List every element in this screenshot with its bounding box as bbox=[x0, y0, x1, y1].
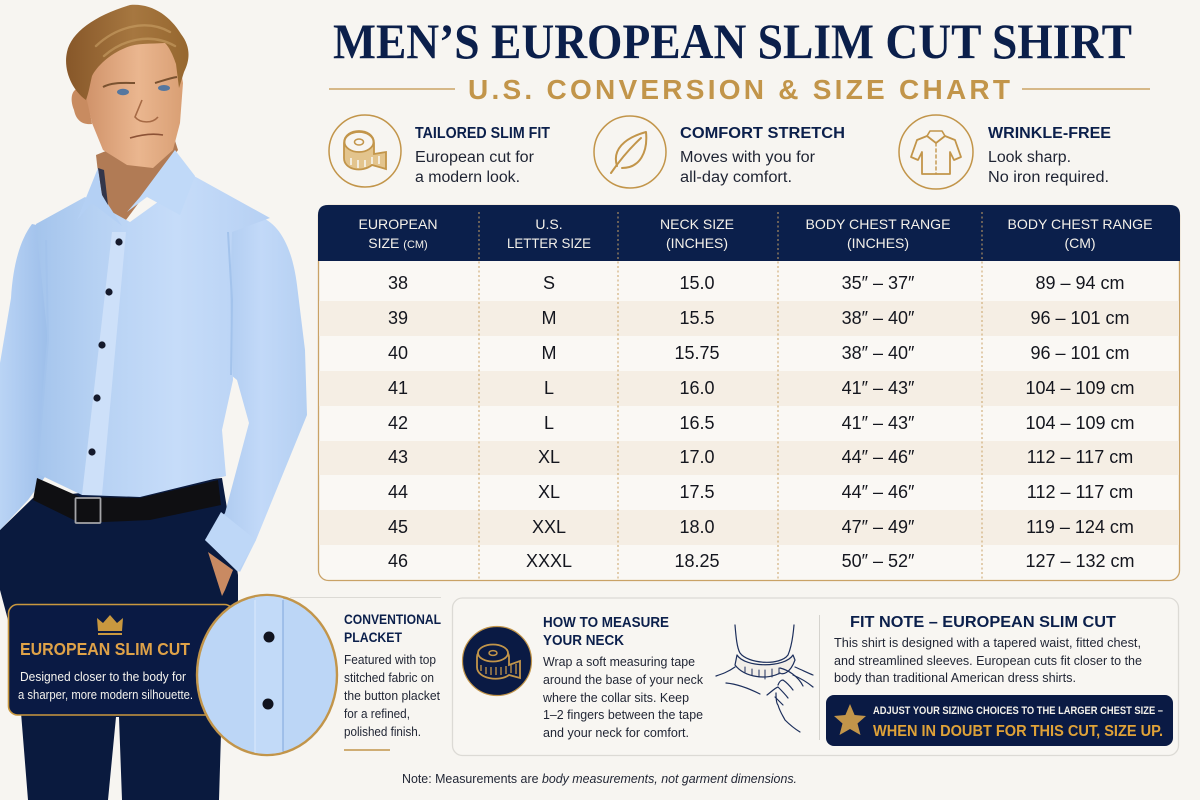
row: 46: 50″ – 52″ bbox=[842, 551, 915, 571]
how to measure text: and your neck for comfort. bbox=[543, 725, 689, 740]
row: 41: 104 – 109 cm bbox=[1025, 378, 1135, 398]
text: TAILORED SLIM FIT bbox=[415, 125, 550, 142]
conventional placket text: PLACKET bbox=[344, 630, 403, 645]
row: 38: 35″ – 37″ bbox=[842, 273, 915, 293]
row: 39: M bbox=[542, 308, 556, 328]
row: 40: 15.75 bbox=[674, 343, 720, 363]
row: 38 bbox=[388, 273, 1125, 293]
row: 38: S bbox=[543, 273, 555, 293]
row: 45 bbox=[388, 517, 1134, 537]
fit note text: body than traditional American dress shirts. bbox=[834, 670, 1076, 685]
size chart table bbox=[318, 205, 1180, 581]
row: 39: 15.5 bbox=[679, 308, 715, 328]
placket bbox=[82, 232, 126, 495]
column header labels: LETTER SIZE bbox=[507, 235, 591, 251]
text bbox=[415, 125, 550, 186]
row: 46: 18.25 bbox=[674, 551, 720, 571]
text bbox=[988, 125, 1111, 186]
text: No iron required. bbox=[988, 169, 1109, 186]
shirt cuff bbox=[205, 512, 256, 572]
text bbox=[680, 125, 845, 186]
shirt body bbox=[36, 176, 270, 497]
alternating row bands bbox=[319, 301, 1179, 545]
brows bbox=[103, 77, 177, 87]
how to measure text: 1–2 fingers between the tape bbox=[543, 707, 703, 722]
subtitle with side rules: U.S. CONVERSION & SIZE CHART bbox=[468, 74, 1010, 105]
neck bbox=[96, 125, 178, 228]
icon: star bbox=[834, 704, 866, 735]
row: 42: 104 – 109 cm bbox=[1025, 413, 1135, 433]
conventional placket text: CONVENTIONAL bbox=[344, 612, 441, 627]
how to measure text: HOW TO MEASURE bbox=[543, 615, 669, 631]
sleeve seam shadows bbox=[37, 232, 232, 470]
nose and mouth bbox=[130, 100, 163, 138]
callout text bbox=[18, 669, 193, 702]
row: 41: 41″ – 43″ bbox=[842, 378, 915, 398]
text: COMFORT STRETCH bbox=[680, 125, 845, 142]
fit note heading: FIT NOTE – EUROPEAN SLIM CUT bbox=[850, 614, 1116, 631]
row: 43: 44″ – 46″ bbox=[842, 447, 915, 467]
row: 44: XL bbox=[538, 482, 560, 502]
ear bbox=[72, 88, 92, 124]
eyes bbox=[117, 85, 170, 95]
row: 38: 15.0 bbox=[679, 273, 715, 293]
trousers bbox=[0, 478, 238, 800]
conventional placket text: stitched fabric on bbox=[344, 670, 434, 685]
icon: measuring tape bbox=[329, 115, 401, 187]
shirt buttons bbox=[88, 238, 123, 456]
row: 44: 44″ – 46″ bbox=[842, 482, 915, 502]
fit note text: and streamlined sleeves. European cuts fit closer to the bbox=[834, 653, 1142, 668]
text: European cut for bbox=[415, 149, 534, 166]
row: 39: 39 bbox=[388, 308, 408, 328]
fit note text bbox=[834, 635, 1142, 685]
column header labels: (CM) bbox=[1064, 235, 1096, 251]
table header band bbox=[318, 205, 1180, 261]
hair bbox=[66, 5, 189, 100]
conventional placket text: the button placket bbox=[344, 688, 440, 703]
row: 38: 38 bbox=[388, 273, 408, 293]
text: Look sharp. bbox=[988, 149, 1071, 166]
column header labels: EUROPEAN bbox=[358, 216, 438, 232]
column header labels: BODY CHEST RANGE bbox=[806, 216, 950, 232]
feature: tailored slim fit bbox=[329, 115, 550, 187]
right collar bbox=[127, 150, 195, 215]
callout: size up bbox=[826, 695, 1173, 746]
icon: feather bbox=[594, 116, 666, 188]
feature: comfort stretch bbox=[594, 116, 845, 188]
column header labels bbox=[358, 216, 1152, 251]
row: 44: 17.5 bbox=[679, 482, 715, 502]
conventional placket text bbox=[290, 598, 441, 750]
row: 38: 89 – 94 cm bbox=[1035, 273, 1125, 293]
row: 40: M bbox=[542, 343, 556, 363]
callout: size up: WHEN IN DOUBT FOR THIS CUT, SIZE UP. bbox=[873, 723, 1163, 740]
icon: crown bbox=[97, 615, 123, 635]
column header labels: BODY CHEST RANGE bbox=[1008, 216, 1152, 232]
row: 46 bbox=[388, 551, 1135, 571]
row: 40: 40 bbox=[388, 343, 408, 363]
text: a modern look. bbox=[415, 169, 520, 186]
text: WRINKLE-FREE bbox=[988, 125, 1111, 142]
hair highlight bbox=[96, 25, 175, 56]
conventional placket text: for a refined, bbox=[344, 706, 410, 721]
table frame bbox=[318, 206, 1180, 580]
row: 43: 43 bbox=[388, 447, 408, 467]
row: 45: 119 – 124 cm bbox=[1026, 517, 1134, 537]
row: 46: 46 bbox=[388, 551, 408, 571]
callout text: Designed closer to the body for bbox=[20, 669, 187, 684]
row: 44: 112 – 117 cm bbox=[1027, 482, 1133, 502]
row: 42 bbox=[388, 413, 1135, 433]
conventional placket text: polished finish. bbox=[344, 724, 421, 739]
row: 46: 127 – 132 cm bbox=[1025, 551, 1135, 571]
row: 41 bbox=[388, 378, 1135, 398]
row: 45: 18.0 bbox=[679, 517, 715, 537]
row: 41: 16.0 bbox=[679, 378, 715, 398]
row: 45: 45 bbox=[388, 517, 408, 537]
illustration: neck with tape and hand bbox=[716, 625, 813, 732]
column header labels: U.S. bbox=[535, 216, 563, 232]
callout: european slim cut bbox=[8, 604, 234, 715]
belt buckle bbox=[76, 498, 100, 523]
left sleeve bbox=[0, 224, 60, 530]
panel: measuring and fit note bbox=[452, 598, 1178, 756]
icon: shirt bbox=[899, 115, 973, 189]
row: 42: L bbox=[544, 413, 554, 433]
row: 42: 16.5 bbox=[679, 413, 715, 433]
how to measure text: around the base of your neck bbox=[543, 672, 703, 687]
model photo: man in blue shirt and navy trousers bbox=[0, 5, 307, 800]
text: all-day comfort. bbox=[680, 169, 792, 186]
column header labels: (INCHES) bbox=[847, 235, 909, 251]
hand in pocket bbox=[208, 552, 233, 596]
title: MEN’S EUROPEAN SLIM CUT SHIRT bbox=[333, 13, 1132, 69]
how to measure text bbox=[542, 615, 703, 740]
collar inner shadow bbox=[98, 168, 108, 205]
column header labels: NECK SIZE bbox=[660, 216, 734, 232]
icon: measuring tape badge bbox=[462, 626, 532, 696]
how to measure text: Wrap a soft measuring tape bbox=[543, 654, 695, 669]
row: 39 bbox=[388, 308, 1130, 328]
column header labels: SIZE (CM) bbox=[368, 235, 428, 251]
row: 39: 38″ – 40″ bbox=[842, 308, 915, 328]
right sleeve bbox=[205, 216, 307, 572]
feature: wrinkle-free bbox=[899, 115, 1111, 189]
callout heading: EUROPEAN SLIM CUT bbox=[20, 639, 190, 659]
magnified placket detail circle bbox=[197, 590, 337, 760]
footnote: Note: Measurements are body measurements, not garment dimensions. bbox=[402, 771, 797, 786]
callout text: a sharper, more modern silhouette. bbox=[18, 687, 193, 702]
row: 45: XXL bbox=[532, 517, 566, 537]
row: 39: 96 – 101 cm bbox=[1030, 308, 1130, 328]
row: 43 bbox=[388, 447, 1133, 467]
conventional placket text: Featured with top bbox=[344, 652, 436, 667]
row: 44: 44 bbox=[388, 482, 408, 502]
placket buttons bbox=[262, 632, 274, 710]
row: 44 bbox=[388, 482, 1133, 502]
row: 43: XL bbox=[538, 447, 560, 467]
callout: size up: ADJUST YOUR SIZING CHOICES TO THE LARGER CHEST SIZE – bbox=[873, 705, 1163, 717]
how to measure text: YOUR NECK bbox=[543, 633, 624, 649]
row: 45: 47″ – 49″ bbox=[842, 517, 915, 537]
row: 41: L bbox=[544, 378, 554, 398]
face bbox=[84, 40, 183, 168]
text: Moves with you for bbox=[680, 149, 815, 166]
row: 42: 42 bbox=[388, 413, 408, 433]
row: 43: 112 – 117 cm bbox=[1027, 447, 1133, 467]
row: 43: 17.0 bbox=[679, 447, 715, 467]
row: 41: 41 bbox=[388, 378, 408, 398]
belt bbox=[33, 478, 221, 523]
row: 40: 38″ – 40″ bbox=[842, 343, 915, 363]
row: 40 bbox=[388, 343, 1130, 363]
fit note text: This shirt is designed with a tapered waist, fitted chest, bbox=[834, 635, 1141, 650]
left collar bbox=[77, 168, 122, 226]
how to measure text: where the collar sits. Keep bbox=[542, 690, 689, 705]
row: 42: 41″ – 43″ bbox=[842, 413, 915, 433]
column header labels: (INCHES) bbox=[666, 235, 728, 251]
row: 40: 96 – 101 cm bbox=[1030, 343, 1130, 363]
row: 46: XXXL bbox=[526, 551, 572, 571]
